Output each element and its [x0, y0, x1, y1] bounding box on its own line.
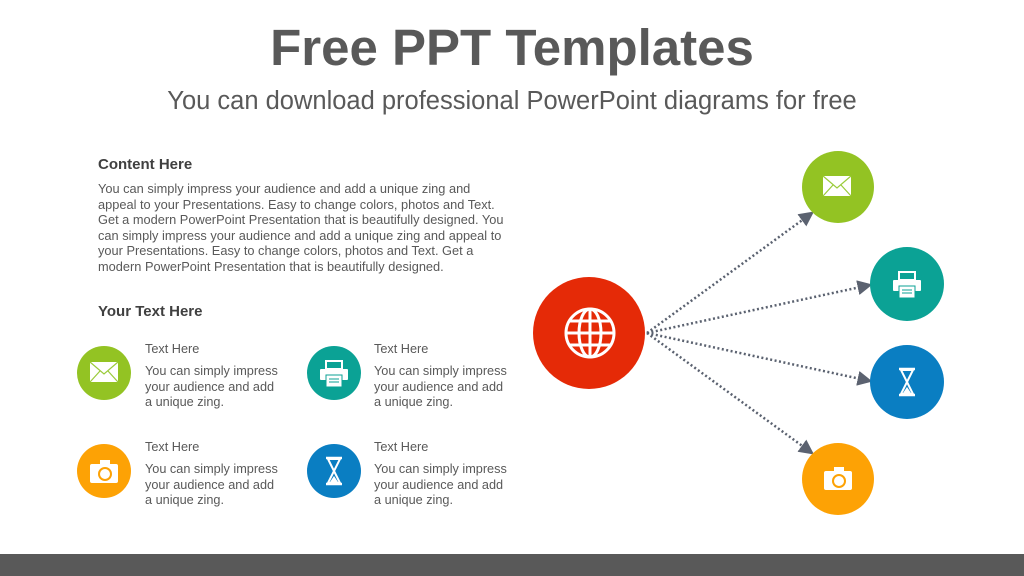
icon: printer big: [870, 247, 944, 321]
item 3 text: Text Here: [145, 440, 199, 454]
item 1 text: [145, 342, 278, 409]
title: Free PPT Templates: [270, 19, 754, 76]
paragraph: modern PowerPoint Presentation that is beautifully designed.: [98, 258, 444, 274]
paragraph: appeal to your Presentations. Easy to change colors, photos and Text.: [98, 196, 495, 212]
item 4 text: [374, 440, 507, 507]
item 4 text: You can simply impress: [374, 462, 507, 476]
item 2 text: Text Here: [374, 342, 428, 356]
item 1 text: a unique zing.: [145, 395, 224, 409]
item 1 text: Text Here: [145, 342, 199, 356]
item 1 text: You can simply impress: [145, 364, 278, 378]
item 2 text: You can simply impress: [374, 364, 507, 378]
subtitle: You can download professional PowerPoint diagrams for free: [167, 87, 857, 115]
item 1 text: your audience and add: [145, 380, 274, 394]
icon: mail big: [802, 151, 874, 223]
icon: globe center: [533, 277, 645, 389]
icon: printer small: [307, 346, 361, 400]
paragraph: You can simply impress your audience and add a unique zing and: [98, 181, 470, 196]
item 3 text: You can simply impress: [145, 462, 278, 476]
heading: content here: Content Here: [98, 156, 192, 173]
icon: hourglass small: [307, 444, 361, 498]
item 4 text: Text Here: [374, 440, 428, 454]
paragraph: [98, 181, 504, 274]
arrows: [647, 213, 870, 453]
icon: hourglass big: [870, 345, 944, 419]
footer bar: [0, 554, 1024, 576]
icon: mail small: [77, 346, 131, 400]
paragraph: can simply impress your audience and add a unique zing and appeal to: [98, 228, 501, 242]
item 4 text: a unique zing.: [374, 493, 453, 507]
item 4 text: your audience and add: [374, 478, 503, 492]
paragraph: Get a modern PowerPoint Presentation that is beautifully designed. You: [98, 212, 504, 227]
paragraph: your Presentations. Easy to change colors, photos and Text. Get a: [98, 243, 473, 258]
icon: camera big: [802, 443, 874, 515]
item 2 text: your audience and add: [374, 380, 503, 394]
heading: your text here: Your Text Here: [98, 303, 202, 320]
item 3 text: a unique zing.: [145, 493, 224, 507]
item 3 text: your audience and add: [145, 478, 274, 492]
item 2 text: [374, 342, 507, 409]
icon: camera small: [77, 444, 131, 498]
item 2 text: a unique zing.: [374, 395, 453, 409]
item 3 text: [145, 440, 278, 507]
